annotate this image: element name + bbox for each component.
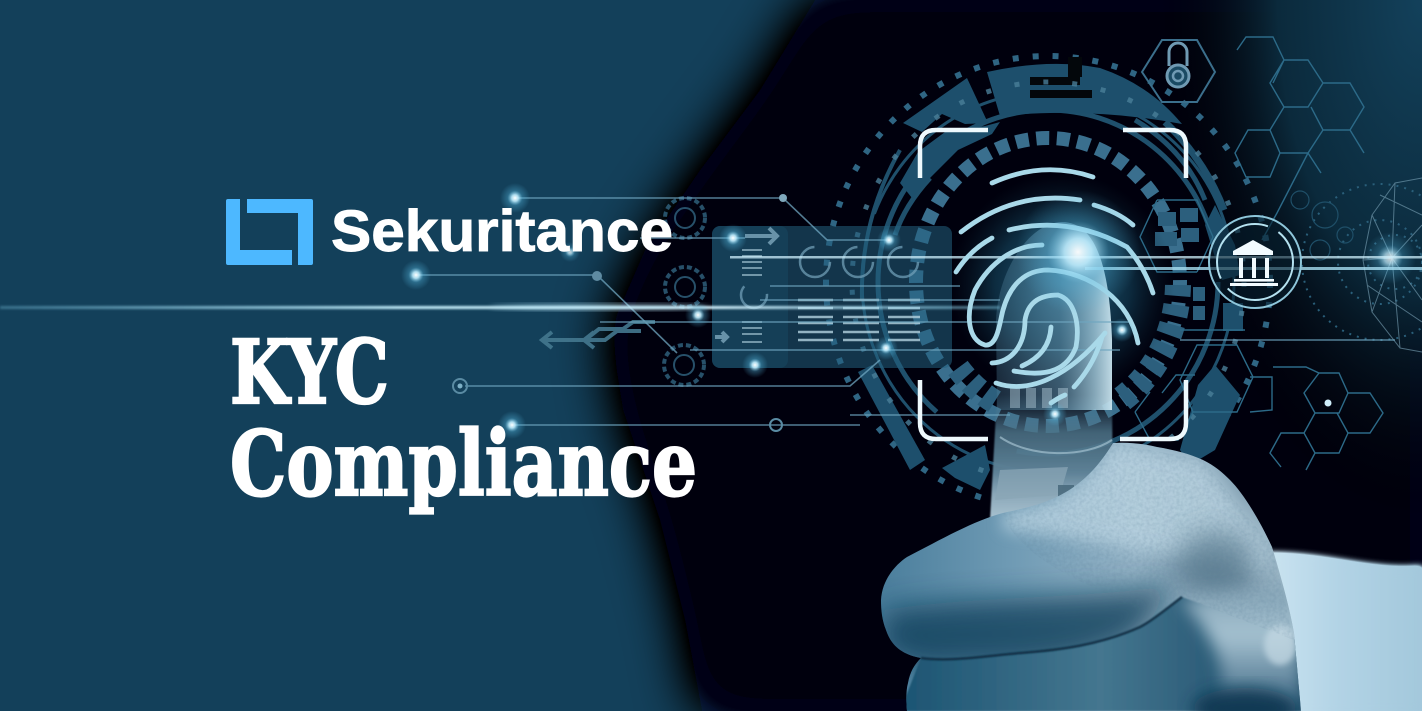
upper hexagons	[1235, 37, 1364, 240]
finger lower section	[990, 395, 1113, 520]
thin ring arcs	[862, 92, 1234, 472]
face dotted rings	[1302, 184, 1422, 340]
knuckle highlight	[1264, 625, 1296, 665]
finger tip glow	[1016, 190, 1140, 314]
title: KYC: KYC	[230, 320, 389, 424]
lock hexagon	[1142, 40, 1215, 102]
translucent data panel	[712, 226, 952, 368]
wrist arm	[1255, 556, 1422, 711]
disc glow	[950, 173, 1174, 397]
lower fold shadow	[1193, 688, 1297, 711]
second light streak	[1085, 267, 1422, 270]
finger	[990, 222, 1113, 520]
panel arrows	[715, 228, 777, 342]
panel body	[712, 226, 952, 368]
ring crown notch	[1030, 57, 1092, 98]
panel divider	[712, 226, 788, 368]
ring band segments	[858, 64, 1243, 490]
square tick ring	[916, 138, 1180, 426]
lower hexagons	[1270, 367, 1383, 470]
long blocks lower left	[958, 368, 995, 402]
logo mark	[226, 199, 313, 265]
gear dials	[664, 198, 705, 385]
hand	[875, 440, 1305, 711]
background: dark blob	[610, 0, 1422, 711]
bank icon	[1209, 216, 1301, 308]
panel gauges	[741, 247, 918, 308]
band dots	[852, 82, 1244, 482]
background: top right teal glow	[1160, 0, 1422, 520]
thumb base tone	[875, 440, 1305, 711]
panel side rows	[742, 250, 762, 342]
blocks inside upper hex	[1155, 208, 1199, 246]
outer block column right	[1193, 287, 1205, 323]
scan frame corners	[920, 130, 1186, 439]
bank building	[1230, 240, 1278, 286]
face mesh lines	[1363, 178, 1422, 352]
crease	[921, 597, 1182, 659]
base arc line	[1000, 437, 1112, 453]
hexagons near ring	[1135, 200, 1272, 440]
lower finger	[900, 597, 1301, 711]
thumb underside shadow	[880, 585, 1175, 668]
circuit lines	[415, 198, 1395, 425]
hand top highlight	[1003, 443, 1272, 575]
light nodes	[401, 183, 1332, 439]
left arrows	[542, 322, 655, 348]
bank circles	[1209, 216, 1301, 308]
title: Compliance: Compliance	[230, 411, 697, 517]
upper light streak	[730, 256, 1422, 258]
face mesh hologram	[1291, 178, 1422, 352]
panel text rows	[798, 300, 920, 340]
finger base patch	[995, 467, 1068, 500]
molecule cluster	[1291, 191, 1353, 260]
right knuckle	[1180, 585, 1301, 711]
hexagon network	[1135, 37, 1383, 470]
base ticks on finger	[1010, 388, 1070, 408]
long blocks lower right	[1118, 285, 1178, 402]
knuckle dark patch	[1175, 533, 1255, 597]
fingerprint	[956, 170, 1153, 403]
finger upper section	[996, 222, 1112, 410]
skin texture	[1003, 443, 1294, 640]
lock icon	[1167, 43, 1189, 87]
finger base dark square	[1058, 485, 1074, 501]
face bright core	[1364, 232, 1416, 284]
main light streak	[0, 306, 1000, 309]
logo wordmark: Sekuritance	[331, 199, 673, 264]
scanner rings	[826, 56, 1270, 508]
streak glow	[490, 304, 710, 310]
outer dotted ring	[826, 56, 1270, 508]
